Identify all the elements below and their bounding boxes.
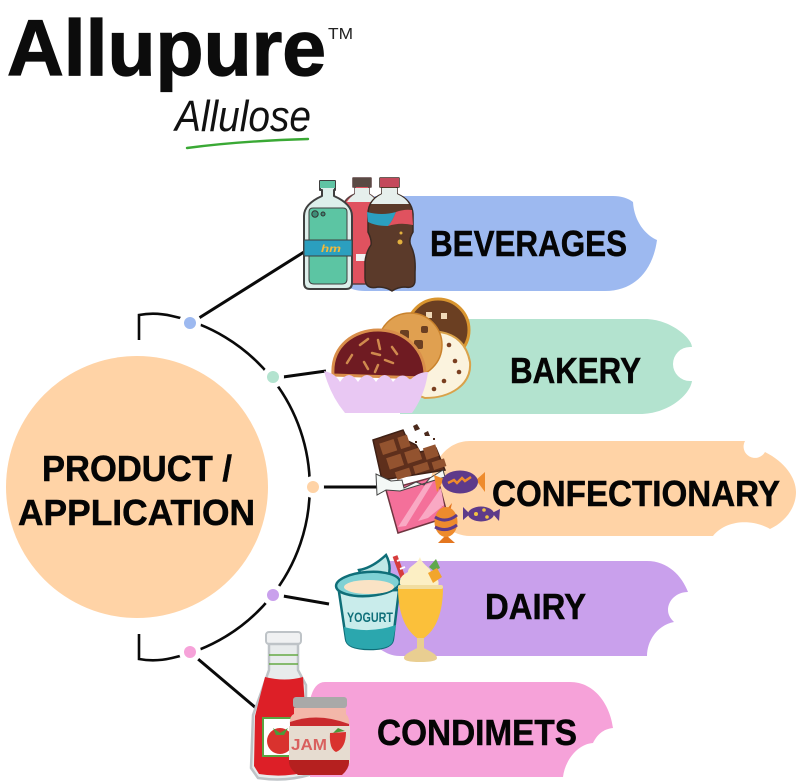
connector arc with branches: [139, 252, 378, 708]
label: CONDIMETS: [377, 712, 577, 753]
banner shape: [310, 682, 613, 777]
label: DAIRY: [485, 586, 586, 627]
brand logo: [7, 3, 353, 148]
panel: dairy: [335, 555, 688, 662]
trademark: TM: [328, 26, 353, 43]
label: BEVERAGES: [430, 223, 627, 264]
banner shape: [345, 196, 657, 291]
central circle: product / application: PRODUCT /: [42, 448, 232, 489]
banner shape: [400, 319, 692, 414]
icon: cookies and cupcake: [324, 299, 470, 413]
node dots: [179, 312, 324, 663]
icon: ketchup bottle and jam jar: [251, 632, 350, 779]
panel: beverages: [304, 178, 657, 291]
banner shape: [430, 441, 796, 536]
icon: bottles: hm: [321, 244, 341, 255]
green underline: [187, 139, 308, 148]
banner shape: [378, 561, 688, 656]
central circle: product / application: APPLICATION: [18, 492, 255, 533]
icon: chocolate bar and candies: [373, 424, 500, 543]
icon: yogurt cup and milkshake: YOGURT: [347, 609, 393, 625]
wordmark: Allupure: Allupure: [7, 3, 326, 92]
icon: yogurt cup and milkshake: [335, 555, 443, 662]
panel: bakery: [324, 299, 692, 414]
panel: condiments: [251, 632, 613, 779]
panel: confectionary: [373, 424, 796, 543]
icon: ketchup bottle and jam jar: JAM: [291, 737, 327, 754]
central circle: product / application: [6, 356, 268, 618]
icon: bottles: [304, 178, 415, 291]
label: CONFECTIONARY: [492, 473, 780, 514]
label: BAKERY: [510, 350, 641, 391]
script subtitle: Allulose: Allulose: [172, 92, 311, 141]
